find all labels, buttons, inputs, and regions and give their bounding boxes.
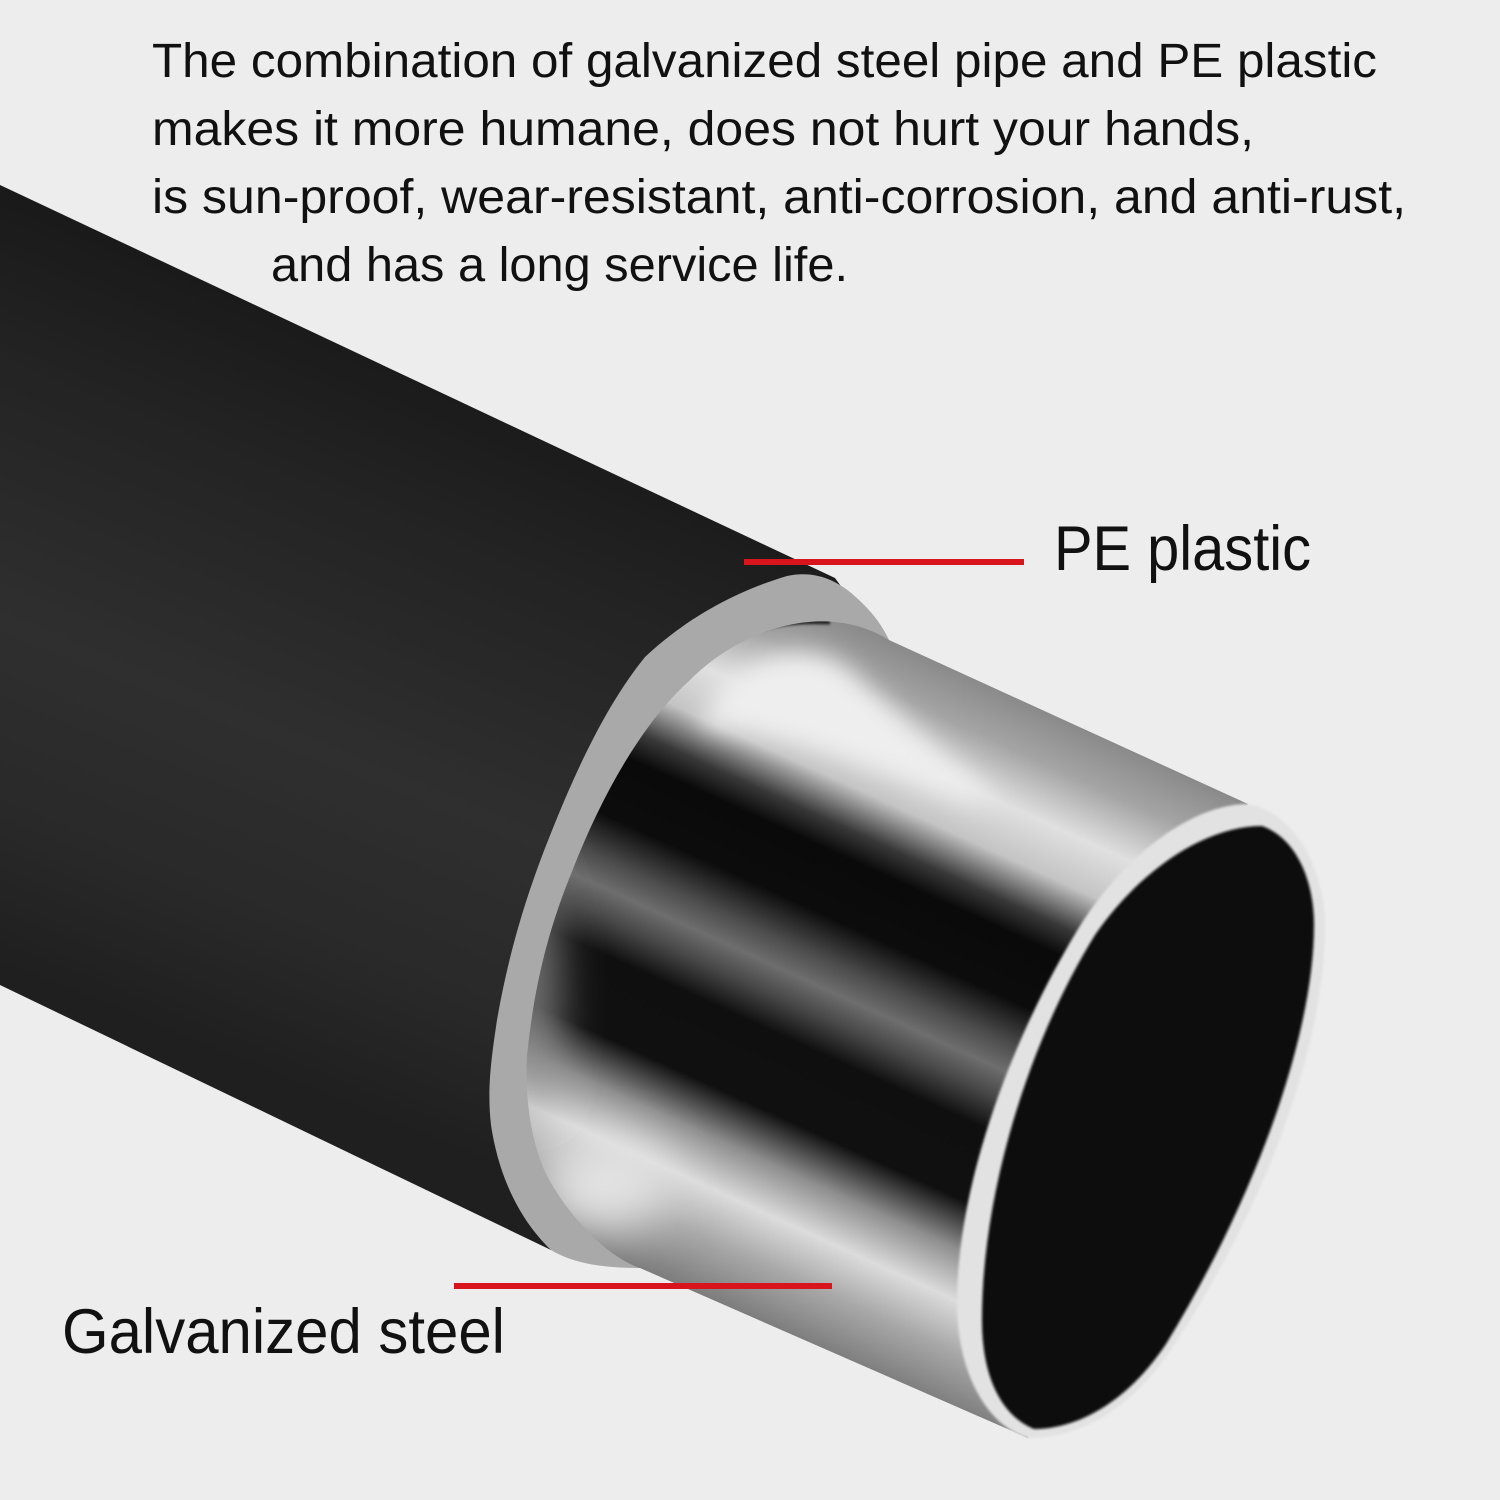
dark shadow under collar top bbox=[767, 621, 832, 632]
gray collar ring bbox=[489, 574, 900, 1268]
callout label: PE plastic: PE plastic bbox=[1054, 514, 1311, 584]
soft gray at left end bbox=[506, 870, 554, 1110]
highlight near collar, top bbox=[700, 653, 1000, 800]
highlight near collar, bottom bbox=[540, 1140, 670, 1230]
steel tube bbox=[526, 621, 1248, 1438]
tube opening bbox=[982, 826, 1314, 1429]
tube mouth rim bbox=[957, 804, 1325, 1438]
description text: and has a long service life. bbox=[271, 239, 848, 292]
description text: The combination of galvanized steel pipe and PE plastic bbox=[152, 35, 1377, 88]
description text bbox=[152, 35, 1406, 292]
black PE plastic body bbox=[0, 185, 880, 1268]
callout line: PE plastic bbox=[744, 559, 1024, 565]
pipe illustration bbox=[0, 185, 1340, 1460]
callout line: galvanized steel bbox=[454, 1283, 832, 1289]
description text: is sun-proof, wear-resistant, anti-corrosion, and anti-rust, bbox=[152, 171, 1406, 224]
callout label: galvanized steel: Galvanized steel bbox=[62, 1297, 505, 1367]
description text: makes it more humane, does not hurt your hands, bbox=[152, 103, 1254, 156]
